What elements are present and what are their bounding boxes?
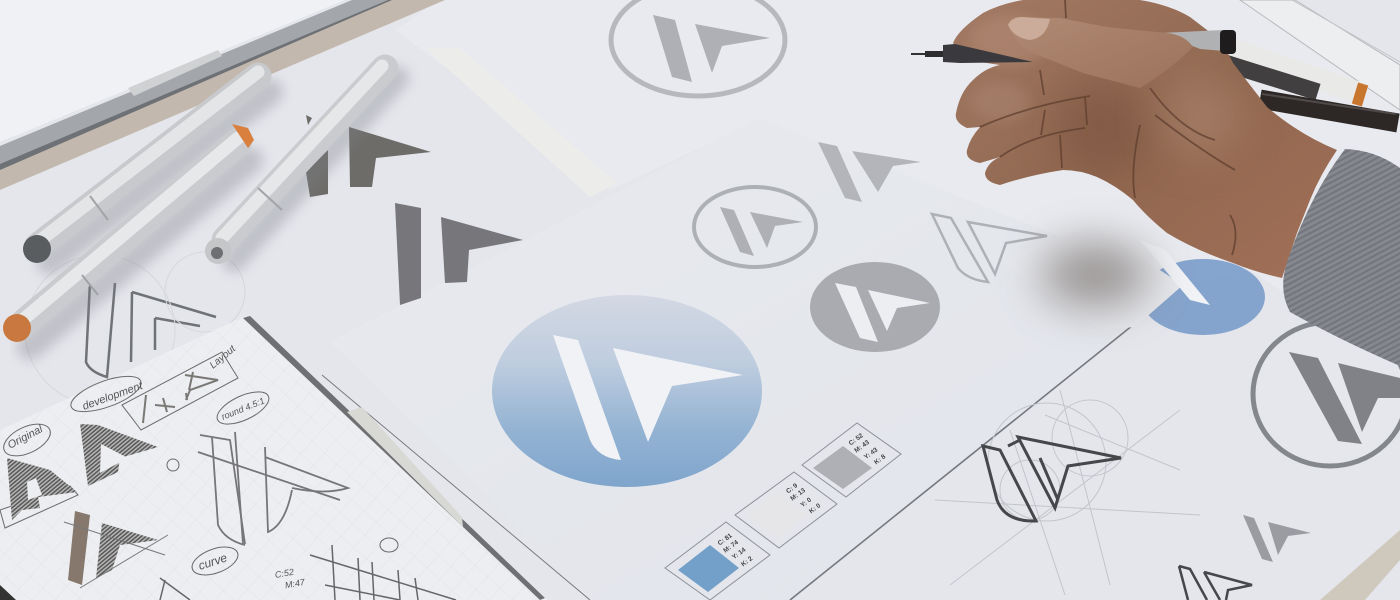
hand with pen <box>953 0 1337 278</box>
panel: sketch notebook <box>0 316 590 600</box>
logo: outline mark bottom-right <box>1179 566 1252 600</box>
logo: grey mark small <box>818 142 921 202</box>
panel: sketch notebook: development <box>81 380 145 413</box>
marker: white orange cap <box>1205 40 1365 96</box>
sketch: grid mark bottom <box>160 545 456 600</box>
marker: right grey cap <box>205 66 397 264</box>
colour swatch: grey <box>802 423 901 497</box>
logo: dark mark large <box>395 203 523 305</box>
colour swatch: pale: M: 13 <box>789 487 807 503</box>
colour swatch: grey: C: 52 <box>848 432 865 447</box>
panel: top-centre sheet <box>395 0 1400 300</box>
colour swatch: grey: M: 43 <box>853 439 871 455</box>
sketch: layout formula <box>143 372 218 423</box>
sketch labels and marks <box>0 352 398 580</box>
colour swatch: blue: C: 81 <box>717 532 734 547</box>
shadow of hand <box>1040 243 1150 307</box>
panel: centre sheet <box>330 118 1183 600</box>
second sheet edge <box>322 375 590 600</box>
hand: tonal shading <box>970 15 1240 170</box>
panel: brown desk corner <box>0 0 445 190</box>
hand: back and fingers <box>953 0 1337 278</box>
logo: construction drawing top-left <box>25 252 245 405</box>
sleeve <box>1283 149 1400 366</box>
colour swatch: blue: K: 2 <box>740 555 754 568</box>
panel: top-left drawing pad <box>0 0 392 170</box>
logo: small ring <box>694 187 816 267</box>
notebook edge strip <box>243 316 545 600</box>
colour swatch: pale: Y: 0 <box>799 496 813 509</box>
hand: thumb nail <box>1008 17 1050 40</box>
logo: outlined mark <box>932 214 1047 282</box>
panel: sketch notebook: Original <box>6 423 45 452</box>
logo: top ring <box>611 0 785 96</box>
panel: sketch notebook: Layout <box>208 343 239 371</box>
marker: middle orange cap <box>3 124 254 347</box>
hand: thumb <box>1008 17 1193 88</box>
logo: blue circle behind the hand <box>1000 225 1265 335</box>
hand: finger creases <box>980 0 1236 255</box>
ruler: top right <box>1240 0 1400 110</box>
marker: top grey cap <box>23 72 270 263</box>
logo: small grey mark bottom-right <box>1243 515 1311 562</box>
panel: sketch notebook: curve <box>197 550 229 573</box>
markers: right group <box>1205 40 1398 123</box>
colour swatch: grey: K: 8 <box>873 453 887 466</box>
panel: bottom-right corner strip <box>1320 530 1400 600</box>
pen: black <box>1260 99 1398 123</box>
logo: large blue circle <box>492 295 762 487</box>
colour swatch: pale: K: 0 <box>808 502 822 515</box>
panel: sketch notebook: M:47 <box>284 577 307 590</box>
logo: outline ring with mark at right <box>1253 322 1400 466</box>
markers: left group <box>3 66 397 347</box>
colour swatch: grey: Y: 43 <box>863 446 880 461</box>
colour swatch: blue <box>665 522 770 600</box>
pen in hand <box>911 30 1236 63</box>
panel: sketch notebook: round 4.5:1 <box>220 396 266 422</box>
colour swatch: blue: M: 74 <box>722 539 740 555</box>
colour swatch: pale: C: 9 <box>785 482 799 495</box>
marker: dark <box>1225 63 1318 92</box>
sketch: original mark <box>7 458 77 520</box>
colour swatch: pale <box>735 472 837 548</box>
panel: left sheet fold <box>425 48 617 197</box>
colour swatch: blue: Y: 14 <box>731 546 748 561</box>
panel: sketch notebook: C:52 <box>274 567 295 580</box>
panel: lower-right sheet <box>790 270 1400 600</box>
logo: grey filled circle <box>810 262 940 352</box>
sketch: development mark <box>80 424 158 486</box>
sketch: pencil mark <box>198 432 348 545</box>
logo: dark mark upper <box>306 115 431 197</box>
logo: construction drawing bottom-right <box>935 390 1200 595</box>
sketch: dark hatched mark <box>64 511 168 588</box>
